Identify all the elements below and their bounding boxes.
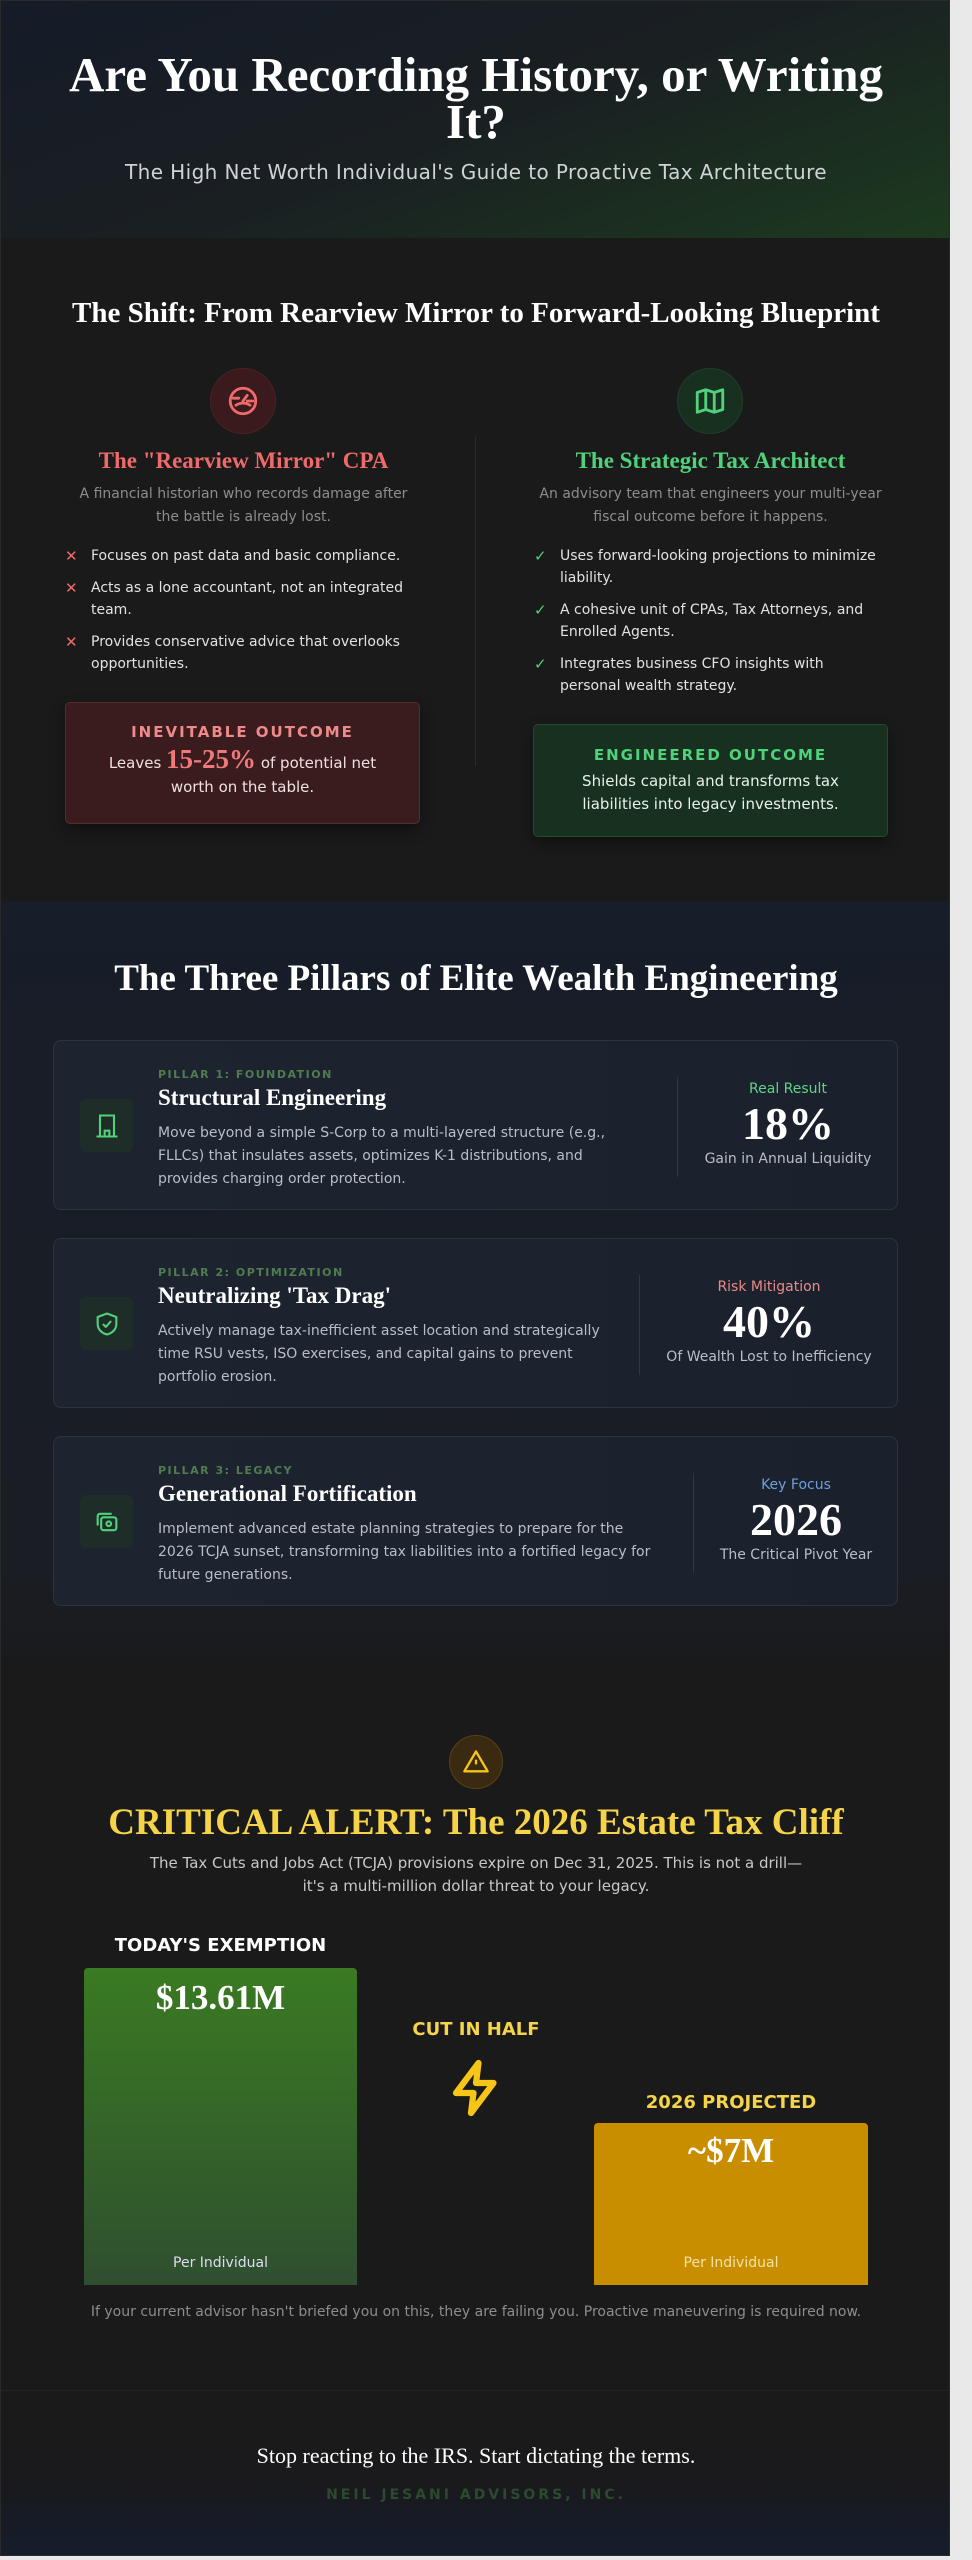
chart: exemption comparison: Per Individual [684,2255,778,2271]
callout: engineered outcome: ENGINEERED OUTCOME [594,746,827,764]
stat: 40%: 40% [723,1296,815,1347]
title: It? [446,94,506,149]
chart: exemption comparison: $13.61M [156,1978,285,2017]
stat: 40% [666,1279,872,1365]
stat: 18% [705,1081,871,1167]
alert description [150,1854,802,1895]
bar: 2026 projected: 2026 PROJECTED [646,2092,816,2113]
icon: shield [80,1297,133,1350]
heading: The Three Pillars of Elite Wealth Engineering [114,958,838,999]
icon: building [80,1099,133,1152]
stat: 2026 [720,1477,872,1563]
icon: money [80,1495,133,1548]
pillar 3 card: Implement advanced estate planning strategies to prepare for the 2026 TCJA sunset, transforming tax liabilities into a fortified legacy for future generations. [158,1521,650,1583]
brand: NEIL JESANI ADVISORS, INC. [326,2487,626,2503]
icon: warning [449,1735,503,1789]
bar: today: TODAY'S EXEMPTION [115,1935,326,1956]
list: negatives: ✕ [65,547,78,565]
chart: exemption comparison: ~$7M [688,2131,774,2170]
pillar 1 card: PILLAR 1: FOUNDATION [158,1068,333,1081]
panel: rearview mirror CPA [65,368,408,672]
stat: 2026: 2026 [750,1494,842,1545]
list: positives: Integrates business CFO insights with personal wealth strategy. [560,656,824,694]
pillar 3 card [53,1436,898,1606]
stat: 2026: Key Focus [761,1477,831,1493]
stat: 18%: 18% [742,1098,834,1149]
panel: strategic tax architect [534,368,882,694]
stat: 18%: Real Result [749,1081,827,1097]
callout: engineered outcome: Shields capital and transforms tax [582,772,839,790]
list: negatives: Acts as a lone accountant, not an integrated team. [91,580,403,618]
list: positives: A cohesive unit of CPAs, Tax Attorneys, and Enrolled Agents. [560,602,863,640]
pillar 2 card: PILLAR 2: OPTIMIZATION [158,1266,344,1279]
list: positives: ✓ [534,601,547,619]
list: negatives: Provides conservative advice that overlooks opportunities. [91,634,400,672]
icon: gauge [210,368,276,434]
description: A financial historian who records damage after the battle is already lost. [80,486,407,525]
icon: map [677,368,743,434]
pillar 2 card [53,1238,898,1408]
label: cut in half: CUT IN HALF [412,2019,540,2040]
pillar 1 card: Move beyond a simple S-Corp to a multi-layered structure (e.g., FLLCs) that insulates assets, optimizes K-1 distributions, and provides charging order protection. [158,1125,605,1187]
description: An advisory team that engineers your multi-year fiscal outcome before it happens. [539,486,882,525]
pillar 1 card [53,1040,898,1210]
list: negatives: Focuses on past data and basic compliance. [91,548,400,564]
list: negatives: ✕ [65,579,78,597]
list: negatives: ✕ [65,633,78,651]
heading: critical alert: CRITICAL ALERT: The 2026 Estate Tax Cliff [108,1802,844,1843]
stat: 18%: Gain in Annual Liquidity [705,1151,871,1167]
card title: The "Rearview Mirror" CPA [99,448,388,473]
stat: 2026: The Critical Pivot Year [720,1547,872,1563]
list: positives: ✓ [534,655,547,673]
callout: engineered outcome [533,724,888,837]
footnote: If your current advisor hasn't briefed you on this, they are failing you. Proactive maneuvering is required now. [91,2304,861,2320]
callout: inevitable outcome: worth on the table. [171,778,314,796]
alert description: The Tax Cuts and Jobs Act (TCJA) provisions expire on Dec 31, 2025. This is not a drill— [150,1854,802,1872]
title [69,47,883,149]
pillar 3 card: PILLAR 3: LEGACY [158,1464,293,1477]
stat: 40%: Risk Mitigation [717,1279,821,1295]
list: positives: Uses forward-looking projections to minimize liability. [560,548,876,586]
chart: exemption comparison: Per Individual [173,2255,268,2271]
pillar 2 card: Actively manage tax-inefficient asset location and strategically time RSU vests, ISO exercises, and capital gains to prevent portfolio erosion. [158,1323,600,1385]
list: positives: ✓ [534,547,547,565]
callout: inevitable outcome: INEVITABLE OUTCOME [131,723,354,741]
footer [1,2390,951,2557]
divider [475,436,476,766]
callout: engineered outcome: liabilities into legacy investments. [582,795,839,813]
subtitle: The High Net Worth Individual's Guide to Proactive Tax Architecture [125,160,827,184]
heading: the shift: The Shift: From Rearview Mirror to Forward-Looking Blueprint [72,297,880,329]
callout: inevitable outcome [65,702,420,824]
callout: inevitable outcome: Leaves 15-25% of potential net [109,744,376,774]
section: three pillars [1,901,951,1684]
pillar 3 card: Generational Fortification [158,1481,417,1506]
title: Are You Recording History, or Writing [69,47,883,102]
icon: bolt [452,2060,497,2116]
list: positives [534,547,876,694]
footer tagline: Stop reacting to the IRS. Start dictating the terms. [257,2443,695,2468]
list: negatives [65,547,403,672]
pillar 2 card: Neutralizing 'Tax Drag' [158,1283,391,1308]
chart: exemption comparison [84,1935,868,2285]
pillar 1 card: Structural Engineering [158,1085,386,1110]
card title: The Strategic Tax Architect [576,448,845,473]
header band [1,1,951,238]
alert description: it's a multi-million dollar threat to your legacy. [303,1877,649,1895]
stat: 40%: Of Wealth Lost to Inefficiency [666,1349,872,1365]
